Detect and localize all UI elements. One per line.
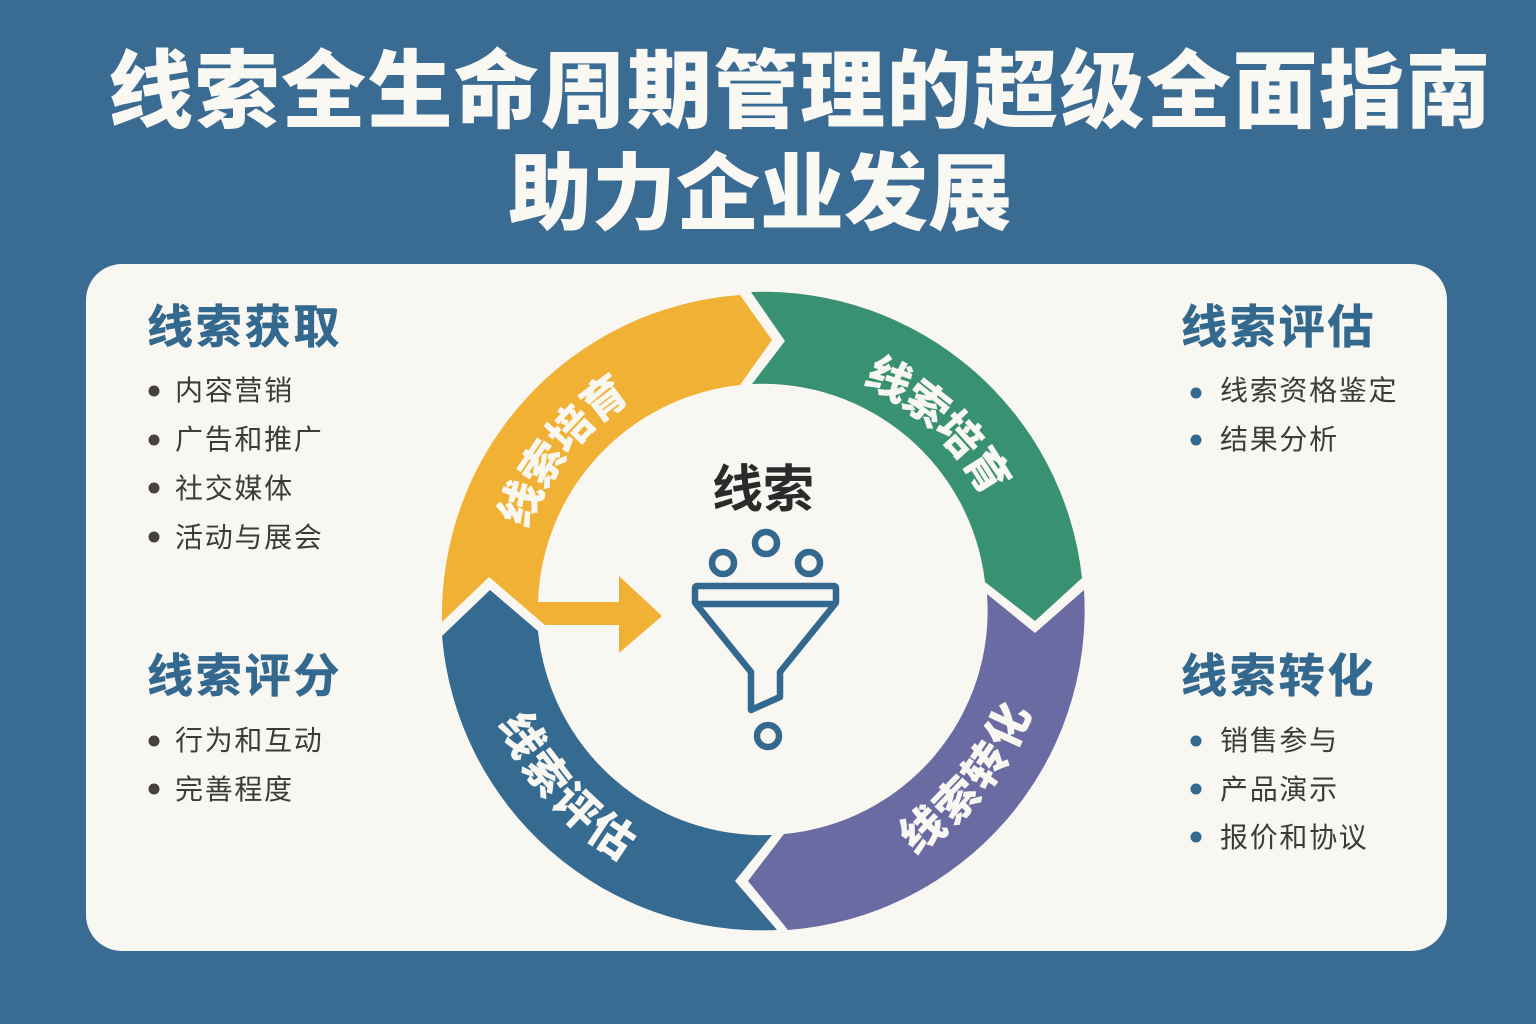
segment: yellow nurture with arrow bbox=[442, 295, 772, 653]
panel: lead evaluation bbox=[1181, 301, 1398, 455]
list: lead evaluation items bbox=[1190, 375, 1398, 455]
segment: blue evaluation bbox=[442, 590, 777, 930]
list: lead acquisition items bbox=[148, 375, 324, 553]
heading: lead acquisition: 线索获取 bbox=[147, 301, 342, 353]
segment: blue evaluation: 线索评估 bbox=[498, 712, 637, 862]
list: lead scoring items: 行为和互动 bbox=[175, 725, 324, 756]
list: lead evaluation items: 结果分析 bbox=[1220, 424, 1339, 455]
list: lead evaluation items: 线索资格鉴定 bbox=[1220, 375, 1398, 406]
title bbox=[108, 45, 1492, 241]
heading: lead conversion: 线索转化 bbox=[1181, 650, 1376, 702]
panel: lead scoring bbox=[147, 650, 342, 805]
segment: yellow nurture with arrow: 线索培育 bbox=[495, 372, 626, 528]
list: lead conversion items bbox=[1190, 725, 1369, 853]
center label: 线索 bbox=[712, 461, 814, 518]
list: lead acquisition items: 活动与展会 bbox=[175, 522, 324, 553]
title: 助力企业发展 bbox=[508, 147, 1012, 241]
icon: funnel bbox=[695, 532, 836, 747]
list: lead acquisition items: 内容营销 bbox=[175, 375, 294, 406]
list: lead conversion items: 销售参与 bbox=[1220, 725, 1339, 756]
segment: purple conversion: 线索转化 bbox=[899, 702, 1032, 856]
segment: green nurture bbox=[751, 292, 1082, 621]
list: lead acquisition items: 广告和推广 bbox=[175, 424, 324, 455]
heading: lead scoring: 线索评分 bbox=[147, 650, 342, 702]
lifecycle ring bbox=[442, 292, 1085, 930]
panel: lead conversion bbox=[1181, 650, 1376, 853]
panel: lead acquisition bbox=[147, 301, 342, 553]
list: lead scoring items: 完善程度 bbox=[175, 774, 294, 805]
segment: purple conversion bbox=[748, 590, 1085, 930]
list: lead acquisition items: 社交媒体 bbox=[175, 473, 294, 504]
panel: main content bbox=[86, 264, 1447, 951]
title: 线索全生命周期管理的超级全面指南 bbox=[108, 45, 1492, 140]
segment: green nurture: 线索培育 bbox=[864, 354, 1014, 492]
list: lead conversion items: 报价和协议 bbox=[1220, 822, 1369, 853]
heading: lead evaluation: 线索评估 bbox=[1181, 301, 1376, 353]
list: lead scoring items bbox=[148, 725, 324, 805]
list: lead conversion items: 产品演示 bbox=[1220, 774, 1339, 805]
